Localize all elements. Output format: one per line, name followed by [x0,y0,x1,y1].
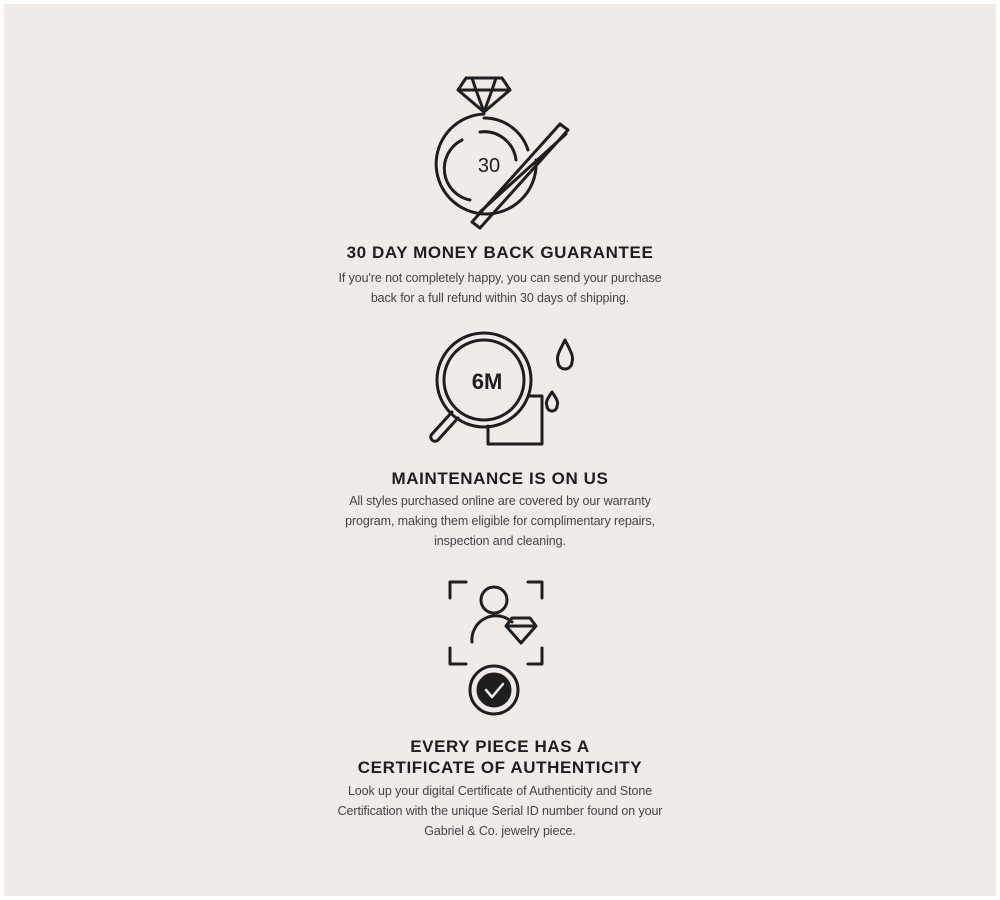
icon: ring with 30 day [436,78,568,228]
text 3: Gabriel & Co. jewelry piece. [424,824,576,838]
title 3 [358,737,642,777]
text 2: All styles purchased online are covered by our warranty [349,494,651,508]
title 3: EVERY PIECE HAS A [410,737,590,756]
text 2 [345,494,655,548]
text 1 [339,271,661,305]
icon: certificate [450,582,542,714]
text 3 [338,784,662,838]
title 2: MAINTENANCE IS ON US [392,469,608,488]
text 2: program, making them eligible for complimentary repairs, [345,514,655,528]
icon: magnifier 6M [431,333,573,444]
icon: magnifier 6M: 6M [472,369,502,394]
text 2: inspection and cleaning. [434,534,566,548]
text 3: Look up your digital Certificate of Authenticity and Stone [348,784,652,798]
title 1: 30 DAY MONEY BACK GUARANTEE [347,243,653,262]
text 3: Certification with the unique Serial ID number found on your [338,804,662,818]
text 1: back for a full refund within 30 days of shipping. [371,291,629,305]
title 3: CERTIFICATE OF AUTHENTICITY [358,758,642,777]
icon: ring with 30 day: 30 [478,155,500,177]
text 1: If you're not completely happy, you can send your purchase [339,271,661,285]
